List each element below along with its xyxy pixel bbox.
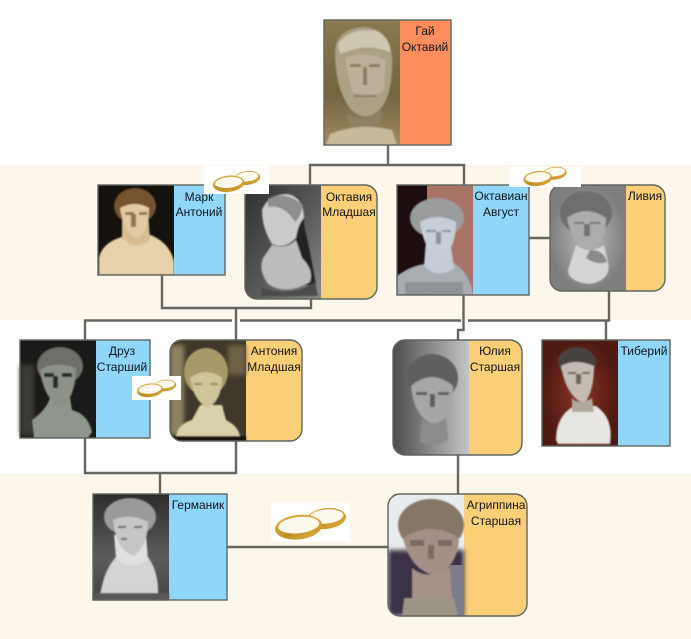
name label: Октавия <box>326 190 372 204</box>
person card: Марк Антоний <box>98 185 225 275</box>
name label: Старший <box>97 360 147 374</box>
name label: Октавий <box>402 40 448 54</box>
person card: Гай Октавий <box>324 20 451 145</box>
name label: Младшая <box>247 360 301 374</box>
name label: Август <box>483 205 520 219</box>
person card: Антония Младшая <box>170 340 302 441</box>
connector lines <box>85 145 609 547</box>
portrait: Агриппина Старшая <box>388 494 464 616</box>
portrait: Октавия Младшая <box>245 185 321 299</box>
name label: Старшая <box>470 360 520 374</box>
person card: Тиберий <box>542 340 670 446</box>
person card: Ливия <box>550 185 665 291</box>
name label: Ливия <box>628 189 662 203</box>
name label: Агриппина <box>467 498 526 512</box>
person card: Октавиан Август <box>397 185 529 295</box>
person card: Друз Старший <box>20 340 150 438</box>
person card: Агриппина Старшая <box>388 494 527 616</box>
name label: Друз <box>109 344 136 358</box>
portrait: Октавиан Август <box>397 185 473 295</box>
portrait: Ливия <box>550 185 626 291</box>
name label: Юлия <box>479 344 511 358</box>
name label: Старшая <box>471 514 521 528</box>
name label: Гай <box>415 24 435 38</box>
portrait: Юлия Старшая <box>393 340 469 455</box>
name label: Антония <box>251 344 297 358</box>
icon: wedding rings Германик – Агриппина <box>271 503 350 542</box>
portrait: Друз Старший <box>20 340 96 438</box>
name label: Германик <box>172 498 225 512</box>
person card: Германик <box>93 494 227 600</box>
name label: Тиберий <box>620 344 668 358</box>
name label: Младшая <box>322 205 376 219</box>
name label: Марк <box>185 190 214 204</box>
person card: Юлия Старшая <box>393 340 522 455</box>
portrait: Гай Октавий <box>324 20 400 145</box>
portrait: Марк Антоний <box>98 185 174 275</box>
icon: wedding rings Октавиан – Ливия <box>509 166 581 188</box>
icon: wedding rings Друз – Антония <box>132 376 181 400</box>
person card: Октавия Младшая <box>245 185 377 299</box>
icon: wedding rings Марк Антоний – Октавия <box>204 166 269 194</box>
portrait: Тиберий <box>542 340 618 446</box>
portrait: Германик <box>93 494 169 600</box>
portrait: Антония Младшая <box>170 340 246 441</box>
name label: Антоний <box>176 205 222 219</box>
name label: Октавиан <box>474 189 528 203</box>
